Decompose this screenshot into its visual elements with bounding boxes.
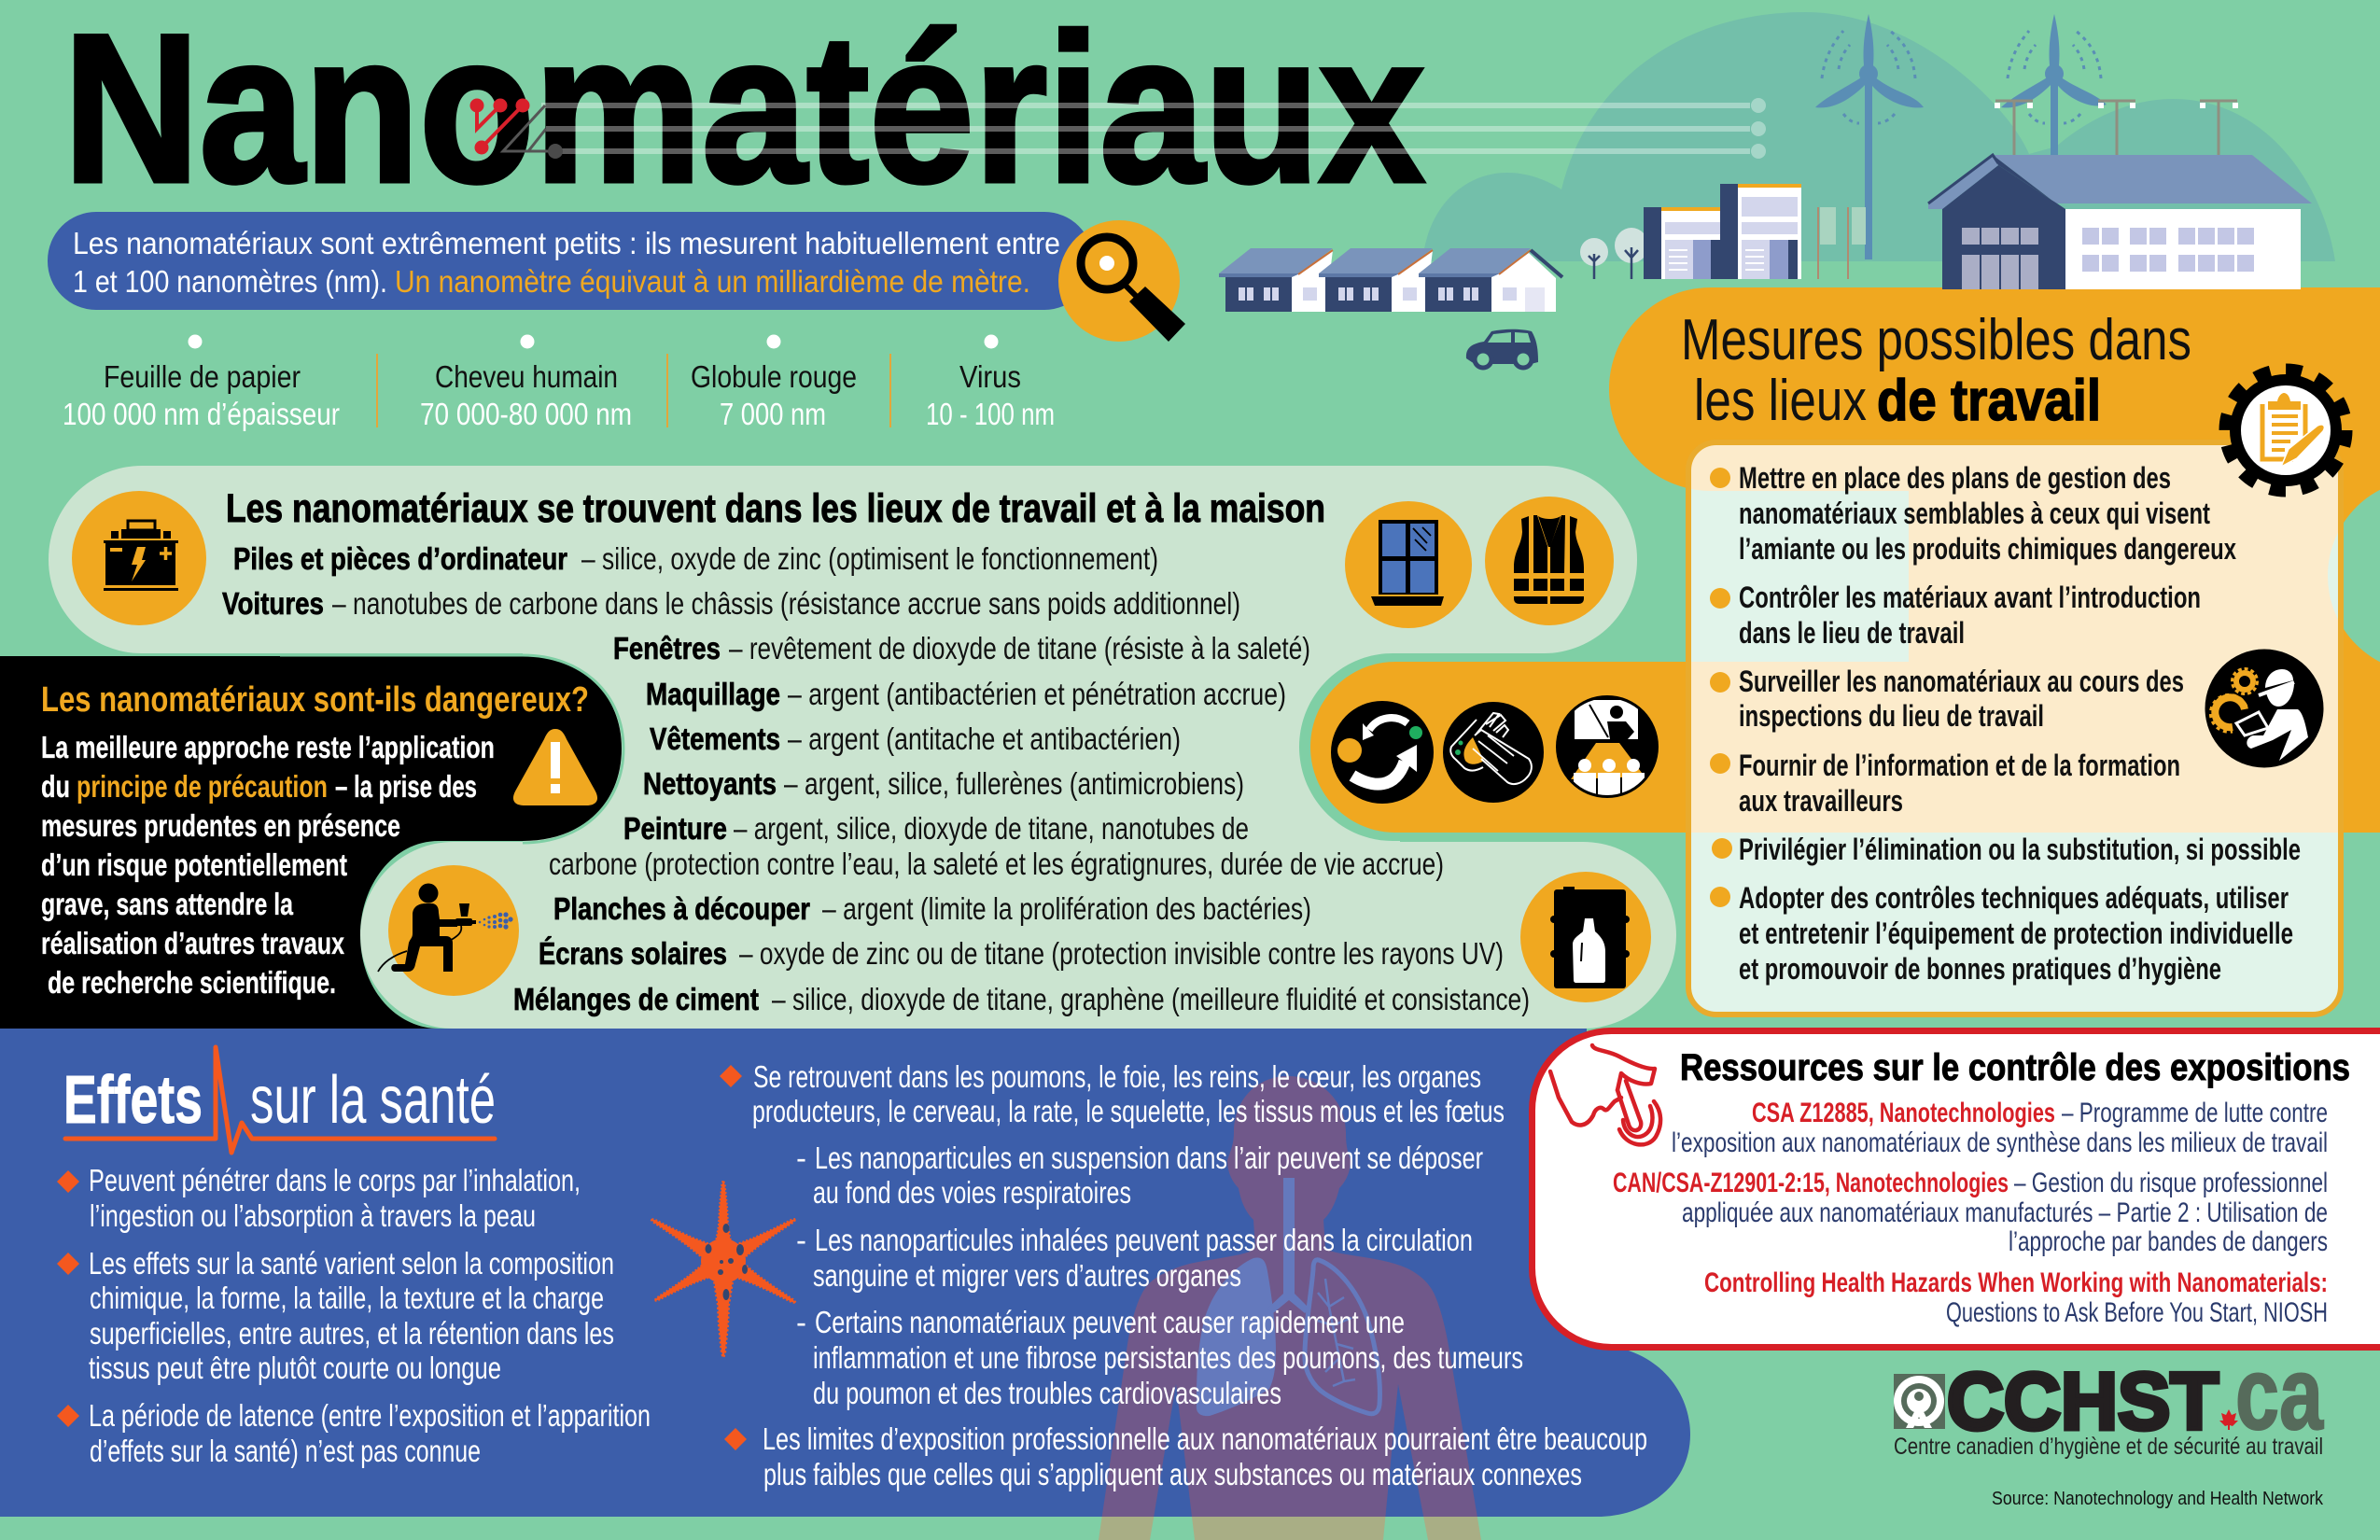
measures list	[1710, 461, 2301, 986]
health effects list left: Les effets sur la santé varient selon la composition	[89, 1246, 614, 1281]
panel: exposure control resources	[1533, 1030, 2380, 1348]
intro pill	[48, 212, 1093, 310]
products list: Écrans solaires	[539, 936, 727, 971]
power poles	[1995, 101, 2238, 155]
panel: are nanomaterials dangerous	[0, 655, 623, 1029]
products list: – argent, silice, dioxyde de titane, nanotubes de	[734, 811, 1249, 846]
products list: Peinture	[623, 811, 727, 846]
products list: Mélanges de ciment	[513, 982, 759, 1016]
products list: Nettoyants	[643, 766, 777, 801]
heading: workplace measures: Mesures possibles dans	[1681, 308, 2191, 372]
size comparison scale: Cheveu humain	[435, 359, 618, 394]
panel: are nanomaterials dangerous: de recherche scientifique.	[48, 965, 336, 1000]
panel: where nanomaterials are found	[49, 466, 1676, 1029]
measures list: Surveiller les nanomatériaux au cours des	[1739, 665, 2184, 698]
measures list: Mettre en place des plans de gestion des	[1739, 461, 2171, 495]
size comparison scale: Feuille de papier	[104, 359, 301, 394]
panel: are nanomaterials dangerous: mesures prudentes en présence	[41, 808, 400, 843]
products list: Piles et pièces d’ordinateur	[233, 541, 567, 576]
source credit: Source: Nanotechnology and Health Network	[1992, 1489, 2324, 1509]
overlay panel: workplace measures	[1688, 442, 2341, 1015]
health effects list right: du poumon et des troubles cardiovasculaires	[813, 1376, 1281, 1410]
health effects list right: -	[796, 1305, 806, 1339]
size comparison scale: Globule rouge	[691, 359, 857, 394]
icon: magnifying glass	[1058, 220, 1185, 342]
trees	[1580, 228, 1648, 279]
panel: health effects	[0, 1029, 1690, 1517]
logo: CCHST.ca	[1894, 1337, 2324, 1451]
health effects list left: tissus peut être plutôt courte ou longue	[89, 1351, 501, 1385]
health effects list right: Les limites d’exposition professionnelle aux nanomatériaux pourraient être beaucoup	[763, 1421, 1647, 1456]
health effects list right: -	[796, 1141, 806, 1175]
intro text: Les nanomatériaux sont extrêmement petits : ils mesurent habituellement entre	[73, 226, 1060, 260]
products list: – oxyde de zinc ou de titane (protection invisible contre les rayons UV)	[739, 936, 1504, 971]
products list: carbone (protection contre l’eau, la saleté et les égratignures, durée de vie accrue)	[549, 847, 1444, 881]
body silhouette lower part	[1099, 1076, 1481, 1540]
products list: – revêtement de dioxyde de titane (résiste à la saleté)	[729, 631, 1310, 665]
products list: Maquillage	[646, 677, 780, 711]
icon: worker with gears	[2205, 650, 2324, 767]
products list: – silice, oxyde de zinc (optimisent le fonctionnement)	[581, 541, 1158, 576]
health effects list right: au fond des voies respiratoires	[813, 1175, 1131, 1210]
products list: – argent (antibactérien et pénétration accrue)	[788, 677, 1286, 711]
logo: CCHST.ca: CCHST	[1947, 1357, 2219, 1447]
measures list: dans le lieu de travail	[1739, 616, 1965, 650]
products list: – nanotubes de carbone dans le châssis (résistance accrue sans poids additionnel)	[332, 586, 1240, 621]
right green circle	[2328, 479, 2380, 673]
products list: – argent, silice, fullerènes (antimicrobiens)	[784, 766, 1244, 801]
icon: car	[1466, 329, 1538, 368]
health effects list right: sanguine et migrer vers d’autres organes	[813, 1258, 1241, 1293]
health effects list right: plus faibles que celles qui s’appliquent aux substances ou matériaux connexes	[763, 1457, 1582, 1491]
heading: health effects with ECG line: sur la santé	[250, 1063, 496, 1138]
products list: – argent (antitache et antibactérien)	[788, 721, 1181, 756]
icon: barrel and bottle	[1520, 872, 1651, 1002]
icon: window	[1345, 501, 1472, 628]
panel: are nanomaterials dangerous: du	[41, 769, 70, 804]
intro text	[73, 226, 1060, 299]
size comparison scale: 10 - 100 nm	[926, 397, 1055, 431]
health effects list right: Les nanoparticules en suspension dans l’air peuvent se déposer	[815, 1141, 1483, 1175]
panel: exposure control resources: CAN/CSA-Z12901-2:15, Nanotechnologies	[1613, 1168, 2009, 1198]
icon: training session	[1556, 695, 1659, 801]
products list: Fenêtres	[613, 631, 721, 665]
icon: warning triangle	[513, 729, 597, 805]
products list	[222, 486, 1530, 1016]
heading: health effects with ECG line: Effets	[63, 1063, 203, 1138]
panel: are nanomaterials dangerous: d’un risque potentiellement	[41, 847, 347, 882]
top orange panel background	[1609, 287, 2380, 833]
size comparison scale: 70 000-80 000 nm	[420, 397, 632, 431]
measures list: et promouvoir de bonnes pratiques d’hygiène	[1739, 952, 2221, 986]
icon: battery	[72, 491, 206, 625]
panel: are nanomaterials dangerous: réalisation d’autres travaux	[41, 926, 344, 960]
heading: workplace measures	[1681, 308, 2191, 433]
health effects list right: Se retrouvent dans les poumons, le foie, les reins, le cœur, les organes	[753, 1059, 1481, 1094]
green notch	[1587, 491, 1909, 662]
intro text: 1 et 100 nanomètres (nm).	[73, 264, 387, 299]
wind turbines	[1815, 14, 2107, 259]
apartment buildings	[1644, 184, 1801, 279]
icon: gear with clipboard	[2226, 371, 2345, 490]
large factory building	[1928, 155, 2312, 289]
panel: are nanomaterials dangerous: – la prise des	[335, 769, 477, 804]
heading: workplace measures: les lieux	[1694, 369, 1867, 433]
panel: are nanomaterials dangerous: principe de précaution	[77, 769, 328, 804]
heading: health effects with ECG line	[63, 1047, 496, 1153]
health effects list right: producteurs, le cerveau, la rate, le squelette, les tissus mous et les fœtus	[752, 1094, 1505, 1128]
health effects list left: La période de latence (entre l’exposition et l’apparition	[89, 1398, 651, 1433]
health effects list right: -	[796, 1223, 806, 1257]
size comparison scale	[63, 334, 1055, 431]
icon: pointing hand	[1550, 1045, 1660, 1144]
size comparison scale: Virus	[959, 359, 1021, 394]
icon: spray painter	[378, 865, 519, 996]
background hills	[1422, 12, 2335, 261]
products list: – argent (limite la prolifération des bactéries)	[822, 891, 1311, 926]
health effects list right	[720, 1059, 1647, 1491]
products list: – silice, dioxyde de titane, graphène (meilleure fluidité et consistance)	[772, 982, 1530, 1016]
panel: are nanomaterials dangerous: La meilleure approche reste l’application	[41, 730, 495, 764]
icon: safety vest	[1485, 497, 1614, 625]
panel: are nanomaterials dangerous: grave, sans attendre la	[41, 887, 293, 921]
street signs	[1818, 207, 1866, 279]
health effects list left: chimique, la forme, la taille, la texture et la charge	[90, 1281, 604, 1315]
products list: Vêtements	[650, 721, 780, 756]
panel: exposure control resources: CSA Z12885, Nanotechnologies	[1752, 1098, 2055, 1128]
health effects list left: Peuvent pénétrer dans le corps par l’inhalation,	[89, 1163, 581, 1197]
measures list: Fournir de l’information et de la formation	[1739, 749, 2180, 782]
row houses	[1219, 248, 1562, 312]
icon: nanoparticle star	[646, 1181, 801, 1357]
products list: Les nanomatériaux se trouvent dans les lieux de travail et à la maison	[226, 486, 1325, 531]
health effects list left: l’ingestion ou l’absorption à travers la peau	[90, 1198, 536, 1233]
panel: are nanomaterials dangerous: Les nanomatériaux sont-ils dangereux?	[41, 680, 589, 720]
measures list: aux travailleurs	[1739, 784, 1903, 818]
health effects list right: inflammation et une fibrose persistantes des poumons, des tumeurs	[813, 1340, 1523, 1375]
products list: Planches à découper	[553, 891, 810, 926]
body silhouette and lungs	[1099, 1076, 1481, 1540]
health effects list right: Les nanoparticules inhalées peuvent passer dans la circulation	[815, 1223, 1473, 1257]
health effects list right: Certains nanomatériaux peuvent causer rapidement une	[815, 1305, 1405, 1339]
size comparison scale: 7 000 nm	[720, 397, 826, 431]
heading: workplace measures: de travail	[1877, 369, 2101, 433]
health effects list left: d’effets sur la santé) n’est pas connue	[90, 1434, 481, 1468]
measures list: inspections du lieu de travail	[1739, 699, 2044, 733]
measures list: Contrôler les matériaux avant l’introduction	[1739, 581, 2201, 614]
icon: hand washing	[1443, 702, 1544, 803]
icon: recycling arrows	[1331, 701, 1434, 804]
orange icon band	[1299, 653, 2380, 841]
logo: CCHST.ca: ca	[2235, 1337, 2324, 1451]
health effects list left: superficielles, entre autres, et la rétention dans les	[90, 1316, 614, 1351]
measures list: nanomatériaux semblables à ceux qui visent	[1739, 497, 2210, 530]
health effects list left	[57, 1163, 651, 1468]
products list: Voitures	[222, 586, 324, 621]
size comparison scale: 100 000 nm d’épaisseur	[63, 397, 340, 431]
title nano circuit lines	[470, 98, 1766, 159]
intro text: Un nanomètre équivaut à un milliardième de mètre.	[395, 264, 1030, 299]
